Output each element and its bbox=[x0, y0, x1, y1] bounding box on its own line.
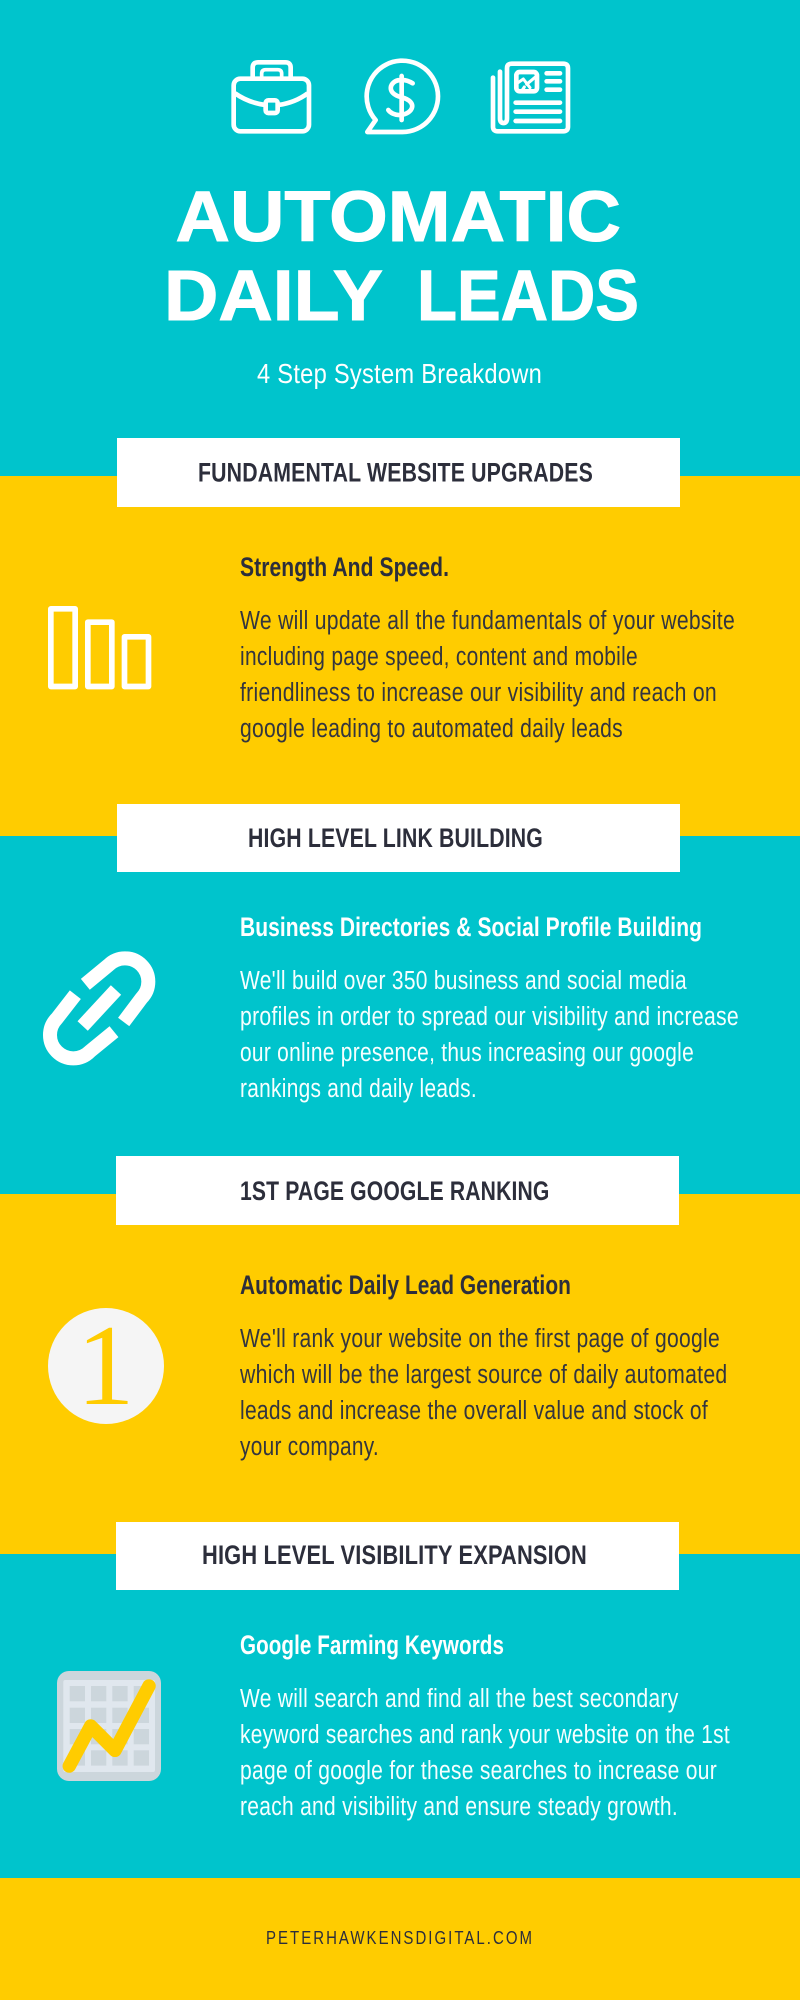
section header: step 4: HIGH LEVEL VISIBILITY EXPANSION bbox=[202, 1540, 587, 1570]
section header: step 3: 1ST PAGE GOOGLE RANKING bbox=[240, 1176, 550, 1206]
title: LEADS bbox=[417, 257, 639, 336]
icon: rising line chart on grid bbox=[57, 1671, 161, 1781]
title: AUTOMATIC bbox=[176, 178, 621, 257]
body text: step 3 bbox=[239, 1325, 728, 1461]
section header: step 1 bbox=[117, 438, 680, 507]
panel: step 4 background bbox=[0, 1554, 800, 1878]
section header: step 3 bbox=[116, 1156, 679, 1225]
body text: step 4: We will search and find all the best secondary bbox=[240, 1685, 678, 1713]
section header: step 2 bbox=[117, 804, 680, 872]
panel: step 3 background bbox=[0, 1194, 800, 1554]
body text: step 4: reach and visibility and ensure steady growth. bbox=[240, 1793, 678, 1821]
body text: step 1: including page speed, content and mobile bbox=[240, 643, 638, 671]
body text: step 2: our online presence, thus increasing our google bbox=[240, 1039, 694, 1067]
subheading: step 1: Strength And Speed. bbox=[240, 552, 449, 582]
section header: step 1: FUNDAMENTAL WEBSITE UPGRADES bbox=[198, 458, 593, 488]
subheading: step 3: Automatic Daily Lead Generation bbox=[240, 1270, 571, 1300]
body text: step 4 bbox=[240, 1685, 730, 1821]
body text: step 1: google leading to automated daily leads bbox=[240, 715, 623, 743]
title bbox=[164, 178, 639, 336]
icon: newspaper bbox=[493, 64, 568, 131]
body text: step 2: We'll build over 350 business and social media bbox=[240, 967, 687, 995]
subheading: step 4: Google Farming Keywords bbox=[240, 1630, 504, 1660]
icon: number one badge: 1 bbox=[76, 1302, 134, 1430]
panel: step 1 background bbox=[0, 476, 800, 836]
icon: number one badge bbox=[48, 1302, 164, 1430]
body text: step 1 bbox=[240, 607, 735, 743]
panel: header background bbox=[0, 0, 800, 476]
body text: step 1: friendliness to increase our visibility and reach on bbox=[240, 679, 717, 707]
title: DAILY bbox=[164, 257, 383, 336]
icon: chain link bbox=[50, 958, 148, 1058]
footer website: PETERHAWKENSDIGITAL.COM bbox=[266, 1927, 534, 1948]
body text: step 3: your company. bbox=[240, 1433, 379, 1461]
panel: step 2 background bbox=[0, 836, 800, 1194]
section header: step 4 bbox=[116, 1522, 679, 1590]
subtitle: 4 Step System Breakdown bbox=[257, 358, 542, 389]
icon: bar chart outline bbox=[51, 609, 148, 686]
body text: step 3: leads and increase the overall value and stock of bbox=[240, 1397, 708, 1425]
icon: dollar speech bubble bbox=[367, 61, 438, 132]
icon: briefcase bbox=[234, 62, 309, 131]
body text: step 2: rankings and daily leads. bbox=[240, 1075, 477, 1103]
body text: step 2 bbox=[240, 967, 739, 1103]
panel: footer background bbox=[0, 1878, 800, 2000]
section header: step 2: HIGH LEVEL LINK BUILDING bbox=[248, 823, 543, 853]
